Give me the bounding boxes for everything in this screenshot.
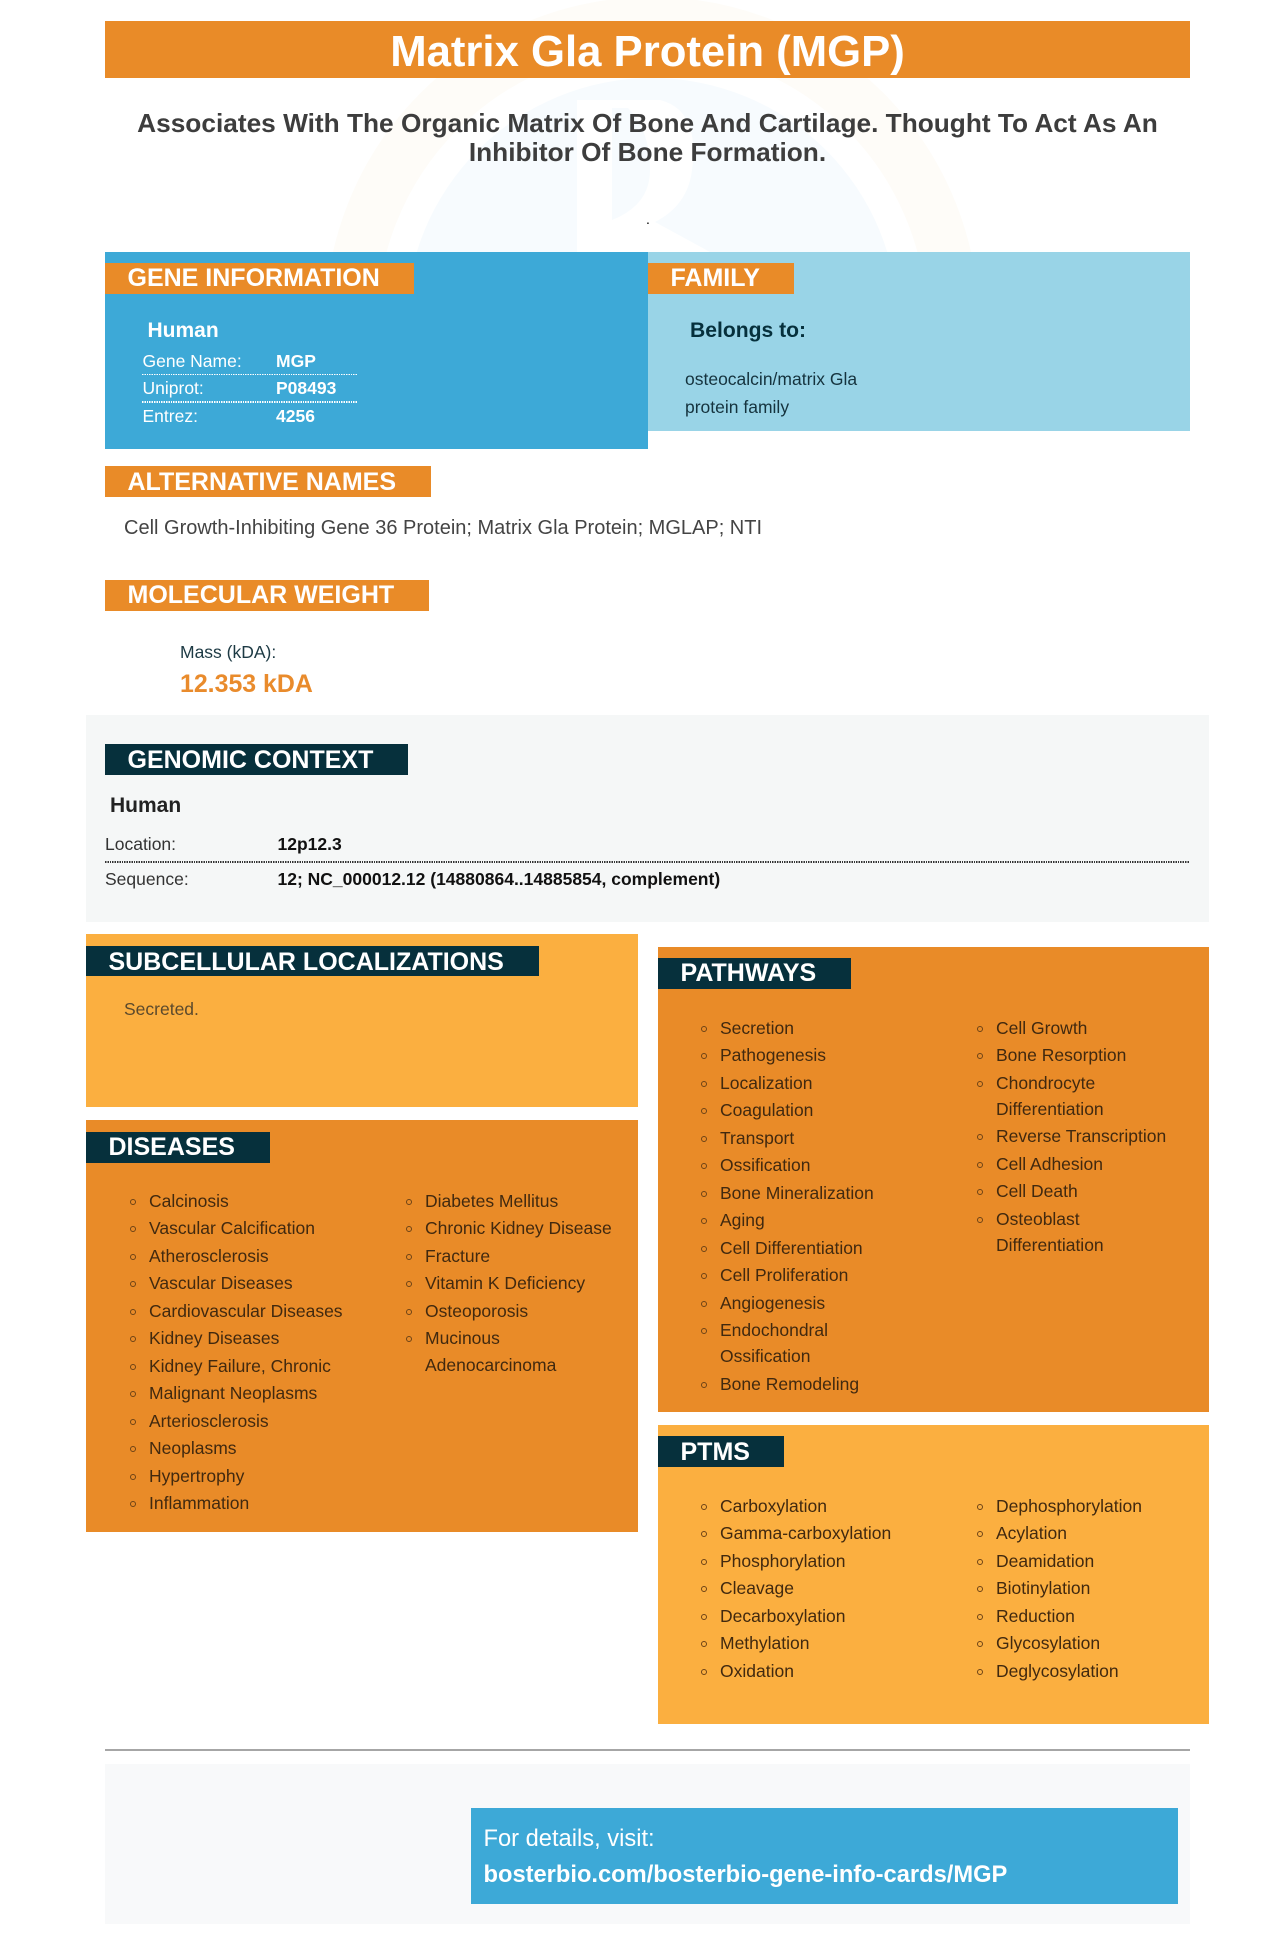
small dot text: .: [646, 211, 650, 227]
label: uniprot: Uniprot:: [142, 378, 204, 398]
subheading: belongs to: Belongs to:: [690, 319, 806, 342]
list: pathways column 2: Bone Resorption: [996, 1045, 1126, 1065]
list: pathways column 2: Chondrocyte: [996, 1073, 1095, 1093]
list: ptms column 2: Deamidation: [996, 1551, 1094, 1571]
list: pathways column 2: Cell Adhesion: [996, 1154, 1103, 1174]
list: diseases column 1: Malignant Neoplasms: [149, 1383, 317, 1403]
localization text: Secreted.: [124, 999, 199, 1019]
list: pathways column 1: Secretion: [720, 1018, 794, 1038]
list: pathways column 2: Cell Growth: [996, 1018, 1087, 1038]
details label: For details, visit:: [484, 1826, 655, 1852]
heading: alternative names: ALTERNATIVE NAMES: [128, 468, 396, 496]
list: diseases column 2: [406, 1191, 612, 1375]
list: pathways column 1: Coagulation: [720, 1100, 813, 1120]
list: pathways column 1: Cell Proliferation: [720, 1265, 848, 1285]
list: ptms column 2: Biotinylation: [996, 1578, 1090, 1598]
list: pathways column 2: Differentiation: [996, 1235, 1104, 1255]
list: diseases column 1: Hypertrophy: [149, 1466, 244, 1486]
list: pathways column 1: Transport: [720, 1128, 794, 1148]
panel: ptms: [658, 1425, 1209, 1724]
family name text: [685, 369, 858, 417]
list: pathways column 1: Cell Differentiation: [720, 1238, 863, 1258]
subtitle description: Associates With The Organic Matrix Of Bone And Cartilage. Thought To Act As An: [137, 108, 1158, 138]
list: pathways column 2: Osteoblast: [996, 1209, 1080, 1229]
list: ptms column 2: Deglycosylation: [996, 1661, 1119, 1681]
list: ptms column 1: Gamma-carboxylation: [720, 1523, 891, 1543]
list: ptms column 2: Dephosphorylation: [996, 1496, 1142, 1516]
list: pathways column 1: Bone Mineralization: [720, 1183, 874, 1203]
mass label: Mass (kDA):: [180, 642, 276, 662]
heading: diseases: DISEASES: [108, 1133, 235, 1161]
heading: family: [648, 263, 794, 294]
label: gene name: Gene Name:: [142, 351, 242, 371]
list: ptms column 1: Decarboxylation: [720, 1606, 845, 1626]
value: sequence: 12; NC_000012.12 (14880864..14885854, complement): [278, 869, 720, 889]
list: diseases column 1: Vascular Diseases: [149, 1273, 293, 1293]
list: pathways column 2: Differentiation: [996, 1099, 1104, 1119]
list: diseases column 1: [130, 1191, 343, 1513]
list: ptms column 2: Reduction: [996, 1606, 1075, 1626]
list: pathways column 2: [977, 1018, 1166, 1255]
title banner: Matrix Gla Protein (MGP): [390, 27, 905, 76]
heading: pathways: [658, 958, 851, 989]
list: diseases column 1: Calcinosis: [149, 1191, 229, 1211]
list: ptms column 1: [701, 1496, 891, 1681]
list: ptms column 1: Oxidation: [720, 1661, 794, 1681]
list: diseases column 1: Kidney Failure, Chronic: [149, 1356, 331, 1376]
panel: gene information: [105, 252, 648, 449]
list: pathways column 1: Aging: [720, 1210, 765, 1230]
list: diseases column 2: Chronic Kidney Disease: [425, 1218, 612, 1238]
list: diseases column 1: Inflammation: [149, 1493, 249, 1513]
heading: gene information: GENE INFORMATION: [128, 264, 380, 292]
subtitle description: [137, 108, 1158, 167]
list: ptms column 1: Carboxylation: [720, 1496, 827, 1516]
subtitle description: Inhibitor Of Bone Formation.: [469, 137, 826, 167]
label: sequence: Sequence:: [105, 869, 189, 889]
list: pathways column 2: Reverse Transcription: [996, 1126, 1166, 1146]
list: diseases column 2: Osteoporosis: [425, 1301, 528, 1321]
callout: details link: [471, 1808, 1178, 1904]
list: diseases column 1: Arteriosclerosis: [149, 1411, 269, 1431]
alternative names text: Cell Growth-Inhibiting Gene 36 Protein; Matrix Gla Protein; MGLAP; NTI: [124, 517, 762, 539]
value: entrez: 4256: [276, 406, 315, 426]
list: pathways column 1: Localization: [720, 1073, 812, 1093]
heading: family: FAMILY: [670, 264, 760, 292]
list: diseases column 1: Atherosclerosis: [149, 1246, 269, 1266]
list: ptms column 2: Glycosylation: [996, 1633, 1100, 1653]
list: ptms column 2: Acylation: [996, 1523, 1067, 1543]
list: pathways column 1: Bone Remodeling: [720, 1374, 859, 1394]
list: pathways column 2: Cell Death: [996, 1181, 1078, 1201]
heading: genomic context: GENOMIC CONTEXT: [128, 746, 373, 774]
list: ptms column 2: [977, 1496, 1142, 1681]
list: pathways column 1: Ossification: [720, 1155, 810, 1175]
list: diseases column 1: Vascular Calcification: [149, 1218, 315, 1238]
list: pathways column 1: Endochondral: [720, 1320, 828, 1340]
panel: genomic context: [86, 715, 1209, 922]
list: diseases column 2: Adenocarcinoma: [425, 1355, 556, 1375]
list: diseases column 1: Neoplasms: [149, 1438, 237, 1458]
family name text: osteocalcin/matrix Gla: [685, 369, 857, 389]
value: gene name: MGP: [276, 351, 316, 371]
value: uniprot: P08493: [276, 378, 336, 398]
list: diseases column 2: Fracture: [425, 1246, 490, 1266]
panel: subcellular localizations: [86, 934, 638, 1107]
label: entrez: Entrez:: [142, 406, 198, 426]
subheading: human: Human: [110, 794, 181, 817]
mass value: 12.353 kDA: [180, 670, 313, 698]
list: pathways column 1: Ossification: [720, 1346, 810, 1366]
value: location: 12p12.3: [278, 834, 342, 854]
list: diseases column 1: Kidney Diseases: [149, 1328, 279, 1348]
heading: diseases: [86, 1132, 270, 1163]
list: diseases column 1: Cardiovascular Diseases: [149, 1301, 343, 1321]
list: pathways column 1: Angiogenesis: [720, 1293, 825, 1313]
panel: family: [648, 252, 1190, 431]
list: diseases column 2: Vitamin K Deficiency: [425, 1273, 585, 1293]
list: diseases column 2: Diabetes Mellitus: [425, 1191, 558, 1211]
panel: pathways: [658, 947, 1209, 1412]
label: location: Location:: [105, 834, 176, 854]
subheading: human: Human: [148, 319, 219, 342]
list: ptms column 1: Cleavage: [720, 1578, 794, 1598]
details url: bosterbio.com/bosterbio-gene-info-cards/MGP: [484, 1862, 1007, 1888]
title banner: [105, 21, 1190, 78]
heading: ptms: [658, 1436, 784, 1467]
heading: molecular weight: MOLECULAR WEIGHT: [128, 581, 394, 609]
list: pathways column 1: [701, 1018, 874, 1394]
heading: pathways: PATHWAYS: [680, 959, 816, 987]
list: ptms column 1: Phosphorylation: [720, 1551, 846, 1571]
panel: diseases: [86, 1120, 638, 1532]
heading: ptms: PTMS: [680, 1438, 750, 1466]
watermark logo: [0, 0, 1288, 260]
list: ptms column 1: Methylation: [720, 1633, 810, 1653]
list: pathways column 1: Pathogenesis: [720, 1045, 826, 1065]
heading: subcellular localizations: SUBCELLULAR LOCALIZATIONS: [108, 948, 504, 976]
panel: footer: [105, 1764, 1190, 1924]
family name text: protein family: [685, 397, 789, 417]
list: diseases column 2: Mucinous: [425, 1328, 500, 1348]
